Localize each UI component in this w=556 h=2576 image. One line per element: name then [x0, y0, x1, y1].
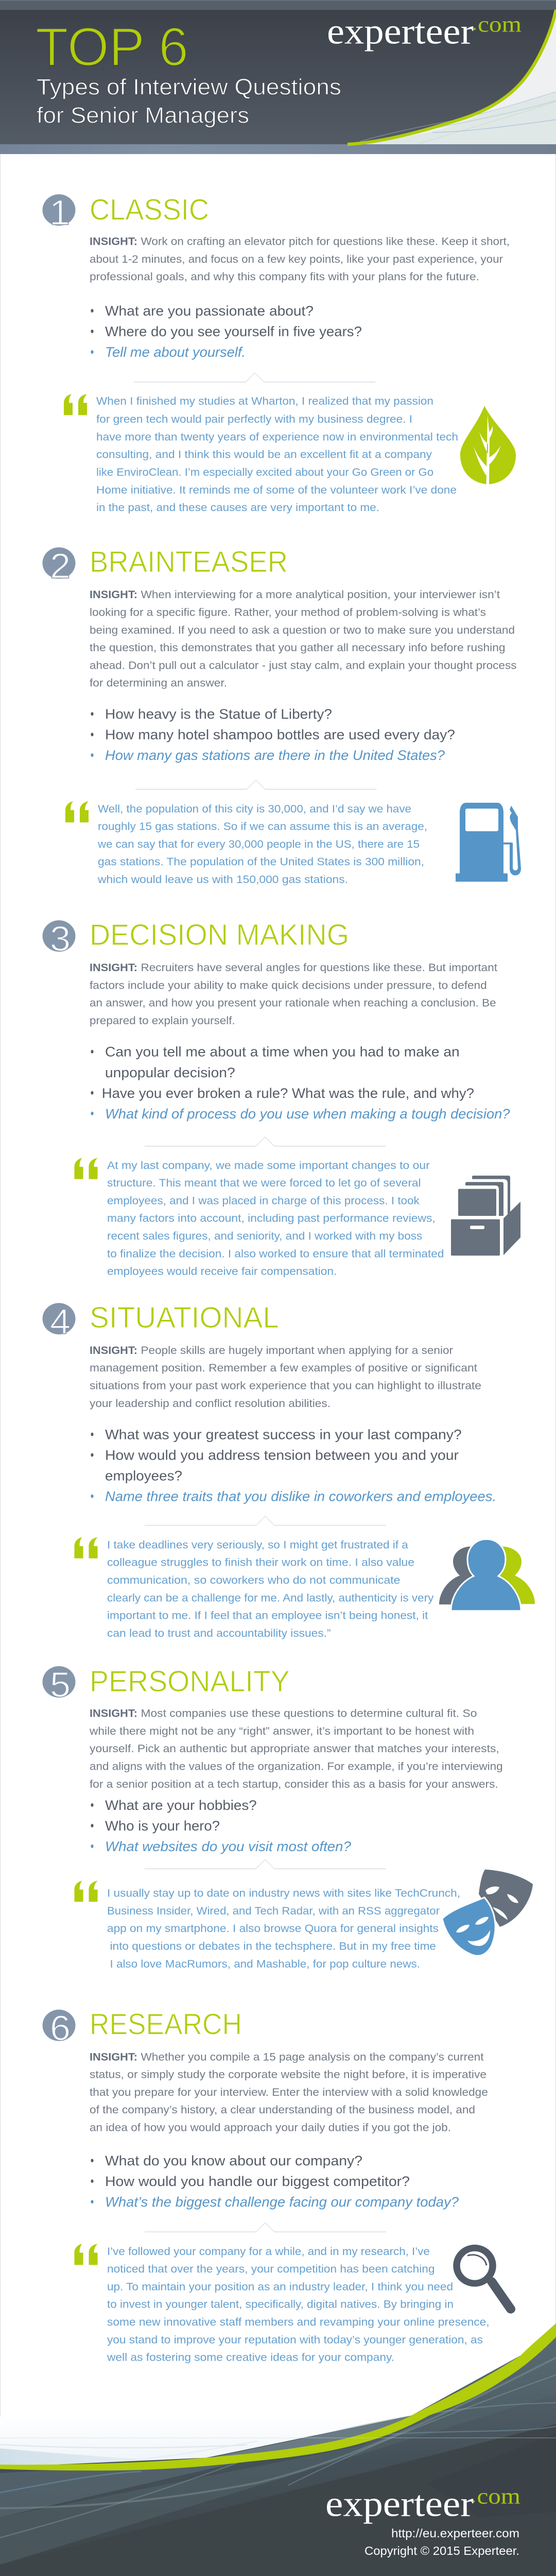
number badge 2: 2 [50, 546, 71, 586]
insight text: INSIGHT: [90, 235, 137, 247]
sample answer quote: recent sales figures, and seniority, and I worked with my boss [107, 1230, 422, 1242]
sample answer quote: like EnviroClean. I’m especially excited about your Go Green or Go [96, 466, 433, 478]
insight text: yourself. Pick an authentic but appropriate answer that matches your interests, [90, 1743, 499, 1755]
insight text [90, 962, 497, 1027]
insight text: INSIGHT: [90, 1344, 137, 1357]
website and copyright: http://eu.experteer.com [391, 2527, 519, 2540]
insight text: and aligns with the values of the organization. For example, if you’re interviewing [90, 1760, 503, 1772]
sample answer quote: you stand to improve your reputation with today’s younger generation, as [107, 2334, 483, 2346]
sample answer quote [107, 1887, 460, 1970]
heading: BRAINTEASER [90, 546, 288, 579]
sample answer quote: important to me. If I feel that an employee isn’t being honest, it [107, 1609, 428, 1621]
insight text: the question, this demonstrates that you gather all necessary info before rushing [90, 642, 505, 654]
sample answer quote: clearly can be a challenge for me. And lastly, authenticity is very [107, 1592, 434, 1604]
insight text: looking for a specific figure. Rather, your method of problem-solving is what’s [90, 606, 486, 618]
insight text [89, 1707, 503, 1790]
question list: Who is your hero? [105, 1818, 220, 1834]
section 1: classic [42, 193, 516, 514]
insight text [90, 589, 516, 689]
insight text: prepared to explain yourself. [90, 1014, 235, 1027]
footer green curve [0, 2324, 556, 2470]
sample answer quote: communication, so coworkers who do not communicate [107, 1574, 401, 1586]
sample answer quote [97, 803, 427, 886]
number badge 2 [42, 546, 75, 586]
sample answer quote [107, 1539, 434, 1639]
insight text: about 1-2 minutes, and focus on a few key points, like your past experience, your [90, 253, 503, 265]
quote mark [64, 394, 87, 415]
sample answer quote [107, 1159, 444, 1277]
number badge 1 [42, 193, 75, 232]
question list: Can you tell me about a time when you had to make an [105, 1044, 460, 1060]
sample answer quote: in the past, and these causes are very important to me. [96, 502, 379, 514]
footer dark wave background [0, 2324, 556, 2576]
sample answer quote: we can say that for every 30,000 people in the US, there are 15 [97, 838, 420, 850]
sample answer quote: roughly 15 gas stations. So if we can assume this is an average, [98, 821, 427, 833]
sample answer quote: Business Insider, Wired, and Tech Radar, with an RSS aggregator [107, 1905, 440, 1917]
insight text: Work on crafting an elevator pitch for questions like these. Keep it short, [141, 235, 510, 247]
footer haze above curve [0, 2416, 556, 2468]
sample answer quote: Well, the population of this city is 30,000, and I’d say we have [98, 803, 411, 815]
insight text [90, 2051, 488, 2133]
question list: What kind of process do you use when making a tough decision? [105, 1106, 510, 1122]
sample answer quote: I’ve followed your company for a while, and in my research, I’ve [107, 2245, 430, 2258]
sample answer quote: colleague struggles to finish their work on time. I also value [107, 1556, 414, 1569]
question list [91, 706, 455, 763]
sample answer quote: When I finished my studies at Wharton, I realized that my passion [96, 395, 433, 408]
sample answer quote: into questions or debates in the techsphere. But in my free time [110, 1940, 436, 1952]
sample answer quote: noticed that over the years, your competition has been catching [107, 2263, 435, 2275]
section 5: personality [42, 1665, 533, 1970]
insight text: INSIGHT: [90, 962, 137, 974]
insight text: situations from your past work experience that you can highlight to illustrate [90, 1380, 481, 1392]
section 6: research [42, 2008, 511, 2363]
footer banner [0, 2324, 556, 2576]
section 4: situational [42, 1301, 535, 1639]
question list: How heavy is the Statue of Liberty? [105, 706, 332, 722]
question list: Where do you see yourself in five years? [105, 324, 362, 340]
divider pointer [134, 373, 375, 382]
number badge 5 [42, 1665, 75, 1704]
insight text: INSIGHT: [90, 589, 137, 601]
insight text: an answer, and how you present your rationale when reaching a conclusion. Be [90, 997, 496, 1009]
insight text: When interviewing for a more analytical position, your interviewer isn’t [141, 589, 500, 601]
sample answer quote: well as fostering some creative ideas for your company. [107, 2351, 394, 2363]
icon: magnifying glass [457, 2248, 511, 2309]
sample answer quote: gas stations. The population of the United States is 300 million, [98, 856, 424, 868]
sample answer quote: some new innovative staff members and revamping your online presence, [107, 2316, 490, 2328]
insight text: status, or simply study the corporate website the night before, it is imperative [90, 2069, 486, 2080]
question list: How would you handle our biggest competitor? [105, 2174, 410, 2189]
question list: What’s the biggest challenge facing our company today? [105, 2194, 459, 2210]
question list: Name three traits that you dislike in coworkers and employees. [105, 1488, 496, 1504]
insight text: INSIGHT: [90, 2051, 137, 2063]
number badge 6: 6 [50, 2008, 71, 2048]
question list: How many gas stations are there in the United States? [105, 748, 445, 763]
question list: What was your greatest success in your last company? [105, 1427, 462, 1442]
insight text: of the company’s history, a clear understanding of the business model, and [90, 2104, 475, 2116]
insight text: factors include your ability to make quick decisions under pressure, to defend [90, 979, 487, 991]
question list: Have you ever broken a rule? What was the rule, and why? [102, 1085, 474, 1101]
sample answer quote: have more than twenty years of experience now in environmental tech [96, 431, 458, 443]
insight text: while there might not be any “right” answer, it’s important to be honest with [89, 1725, 474, 1737]
heading: PERSONALITY [90, 1665, 290, 1698]
sample answer quote: I also love MacRumors, and Mashable, for pop culture news. [110, 1958, 420, 1970]
icon: leaf [460, 406, 516, 484]
divider pointer [145, 1516, 386, 1526]
question list: employees? [105, 1468, 182, 1483]
header curved corner with waves [348, 10, 556, 144]
number badge 4 [42, 1301, 75, 1341]
question list [91, 2153, 459, 2210]
question list [91, 1044, 510, 1122]
experteer logo: experteer [325, 2484, 474, 2524]
sample answer quote: At my last company, we made some important changes to our [107, 1159, 430, 1172]
insight text: People skills are hugely important when applying for a senior [141, 1344, 453, 1357]
sample answer quote: app on my smartphone. I also browse Quora for general insights [107, 1923, 439, 1935]
heading: RESEARCH [90, 2008, 242, 2041]
quote mark [74, 1880, 98, 1902]
question list: How many hotel shampoo bottles are used every day? [105, 727, 455, 742]
quote mark [74, 1537, 98, 1558]
title: top 6: TOP 6 [36, 17, 188, 77]
quote mark [65, 801, 89, 822]
insight text: ahead. Don’t pull out a calculator - just stay calm, and explain your thought process [90, 659, 516, 671]
sample answer quote: Home initiative. It reminds me of some of the volunteer work I’ve done [96, 484, 457, 496]
question list [91, 1427, 496, 1504]
divider pointer [135, 780, 377, 789]
question list: What websites do you visit most often? [105, 1839, 352, 1854]
heading: DECISION MAKING [90, 919, 349, 952]
section 3: decision making [42, 919, 520, 1277]
subtitle: Types of Interview Questions [37, 74, 341, 99]
subtitle: for Senior Managers [37, 103, 249, 128]
website and copyright [364, 2527, 519, 2557]
insight text: being examined. If you need to ask a question or two to make sure you understand [90, 624, 515, 636]
insight text [90, 235, 510, 283]
experteer logo: experteer [327, 11, 474, 52]
sample answer quote: structure. This meant that we were forced to let go of several [107, 1177, 421, 1189]
header banner [0, 0, 556, 154]
question list: unpopular decision? [105, 1064, 235, 1080]
number badge 3: 3 [50, 919, 71, 958]
question list [91, 303, 362, 360]
experteer logo: com [478, 12, 522, 37]
sample answer quote: I usually stay up to date on industry news with sites like TechCrunch, [107, 1887, 460, 1899]
subtitle [37, 74, 341, 128]
insight text: your leadership and conflict resolution abilities. [90, 1397, 331, 1410]
insight text: for determining an answer. [90, 677, 227, 689]
section 2: brainteaser [42, 546, 521, 886]
insight text: management position. Remember a few examples of positive or significant [90, 1362, 477, 1374]
insight text: Whether you compile a 15 page analysis on the company’s current [141, 2051, 484, 2063]
divider pointer [145, 1137, 386, 1146]
sample answer quote: employees would receive fair compensation. [107, 1265, 337, 1277]
question list: What are your hobbies? [105, 1798, 257, 1813]
sample answer quote [107, 2245, 490, 2363]
insight text: that you prepare for your interview. Enter the interview with a solid knowledge [90, 2086, 488, 2098]
insight text: professional goals, and why this company fits with your plans for the future. [90, 271, 479, 283]
insight text: for a senior position at a tech startup, consider this as a basis for your answers. [90, 1778, 498, 1790]
insight text: Recruiters have several angles for questions like these. But important [141, 962, 497, 974]
insight text: an idea of how you would approach your daily duties if you got the job. [90, 2122, 451, 2133]
number badge 3 [42, 919, 75, 958]
footer grey wedge [213, 2416, 411, 2458]
insight text: INSIGHT: [90, 1707, 137, 1720]
insight text: Most companies use these questions to determine cultural fit. So [141, 1707, 477, 1720]
heading: CLASSIC [90, 194, 209, 226]
sample answer quote: I take deadlines very seriously, so I might get frustrated if a [107, 1539, 408, 1551]
question list: What do you know about our company? [105, 2153, 362, 2168]
question list [91, 1798, 352, 1854]
number badge 6 [42, 2008, 75, 2048]
website and copyright: Copyright © 2015 Experteer. [364, 2544, 519, 2557]
icon: theater masks [442, 1870, 533, 1956]
heading: SITUATIONAL [90, 1301, 279, 1334]
divider pointer [145, 2223, 386, 2232]
insight text [90, 1344, 481, 1410]
sample answer quote: can lead to trust and accountability issues.” [107, 1627, 331, 1639]
sample answer quote: consulting, and I think this would be an excellent fit at a company [96, 449, 432, 461]
quote mark [74, 2244, 98, 2265]
sample answer quote: employees, and I was placed in charge of this process. I took [107, 1195, 420, 1207]
number badge 5: 5 [50, 1665, 71, 1704]
sample answer quote: to invest in younger talent, specifically, digital natives. By bringing in [107, 2298, 454, 2311]
question list: How would you address tension between you and your [105, 1447, 459, 1463]
sample answer quote: for green tech would pair perfectly with my business degree. I [96, 413, 412, 426]
sample answer quote [96, 395, 458, 514]
number badge 1: 1 [49, 193, 70, 232]
experteer logo: com [477, 2484, 520, 2509]
number badge 4: 4 [50, 1301, 71, 1341]
sample answer quote: up. To maintain your position as an industry leader, I think you need [107, 2281, 453, 2293]
icon: gas pump [456, 803, 521, 882]
icon: three people [439, 1539, 535, 1611]
sample answer quote: to finalize the decision. I also worked to ensure that all terminated [107, 1248, 444, 1260]
question list: Tell me about yourself. [105, 344, 246, 360]
sample answer quote: many factors into account, including past performance reviews, [107, 1212, 436, 1225]
divider pointer [145, 1860, 386, 1869]
quote mark [74, 1158, 98, 1179]
sample answer quote: which would leave us with 150,000 gas stations. [97, 873, 348, 886]
icon: file box [451, 1176, 520, 1256]
question list: What are you passionate about? [105, 303, 314, 319]
